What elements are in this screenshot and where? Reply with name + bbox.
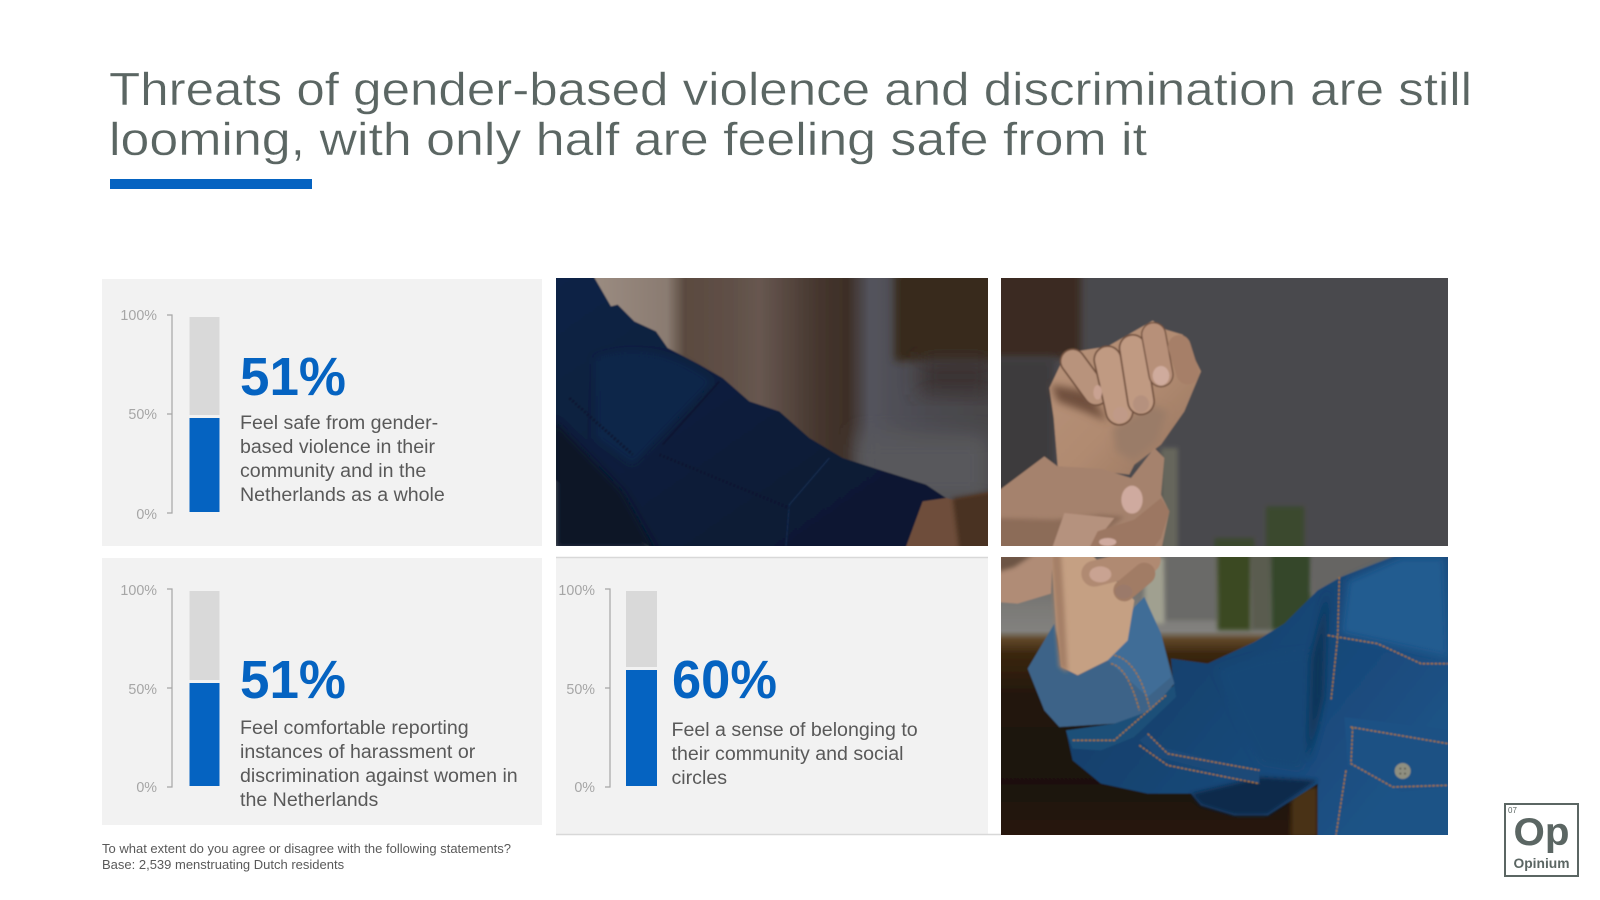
logo: Opinium: 07 [1508, 806, 1517, 815]
description: comfortable reporting: instances of harassment or [240, 741, 476, 763]
title: looming, with only half are feeling safe from it [109, 113, 1147, 165]
chart: 51% gauge, comfortable reporting: 50% [128, 682, 157, 698]
photo: wrist being gripped [1001, 278, 1448, 546]
fingers [1073, 335, 1188, 411]
chart: 51% gauge, safe from violence: 0% [136, 507, 157, 523]
cuff [1026, 624, 1175, 728]
description: feel safe [240, 412, 445, 506]
logo: Opinium [1505, 804, 1578, 876]
logo: Opinium: Opinium [1514, 855, 1570, 871]
stat: 51%: 51% [240, 650, 346, 710]
description: comfortable reporting: Feel comfortable reporting [240, 717, 469, 739]
photo: navy sleeve arm [553, 271, 1001, 551]
description: feel safe: community and in the [240, 460, 426, 482]
description: belonging: Feel a sense of belonging to [672, 719, 918, 741]
description: feel safe: Feel safe from gender- [240, 412, 438, 434]
description: comfortable reporting: discrimination against women in [240, 765, 518, 787]
description: belonging: circles [672, 767, 727, 789]
logo: Opinium: Op [1514, 811, 1570, 854]
panel: sense of belonging [556, 557, 1001, 835]
panel: feel safe from violence [102, 279, 542, 546]
chart: 60% gauge, belonging [558, 583, 657, 796]
panel: comfortable reporting [102, 558, 542, 825]
chart: 51% gauge, safe from violence [120, 308, 220, 523]
sleeve [1066, 554, 1451, 840]
stat: 60%: 60% [672, 650, 777, 710]
photo: denim sleeve and gripped arm [998, 550, 1451, 840]
chart: 51% gauge, safe from violence: 50% [128, 407, 157, 423]
description: feel safe: Netherlands as a whole [240, 484, 445, 506]
description: feel safe: based violence in their [240, 436, 435, 458]
chart: 60% gauge, belonging: 50% [566, 682, 595, 698]
description: comfortable reporting: the Netherlands [240, 789, 379, 811]
footnote: To what extent do you agree or disagree with the following statements? [102, 841, 511, 856]
stitching [1073, 577, 1448, 835]
chart: 51% gauge, safe from violence: 100% [120, 308, 157, 324]
title accent bar [110, 179, 312, 189]
footnote: Base: 2,539 menstruating Dutch residents [102, 857, 345, 872]
chart: 60% gauge, belonging: 100% [558, 583, 595, 599]
title: Threats of gender-based violence and discrimination are still [109, 63, 1472, 115]
gripping hand [998, 448, 1169, 551]
chart: 51% gauge, comfortable reporting: 100% [120, 583, 157, 599]
chart: 60% gauge, belonging: 0% [574, 780, 595, 796]
title [109, 63, 1472, 165]
description: belonging [672, 719, 918, 789]
footnote [102, 841, 511, 872]
description: belonging: their community and social [672, 743, 903, 765]
chart: 51% gauge, comfortable reporting [120, 583, 220, 796]
forearm and gripping fingers [1051, 554, 1134, 675]
fist back and wrist [1049, 321, 1201, 475]
chart: 51% gauge, comfortable reporting: 0% [136, 780, 157, 796]
stat: 51%: 51% [240, 347, 346, 407]
description: comfortable reporting [240, 717, 518, 811]
